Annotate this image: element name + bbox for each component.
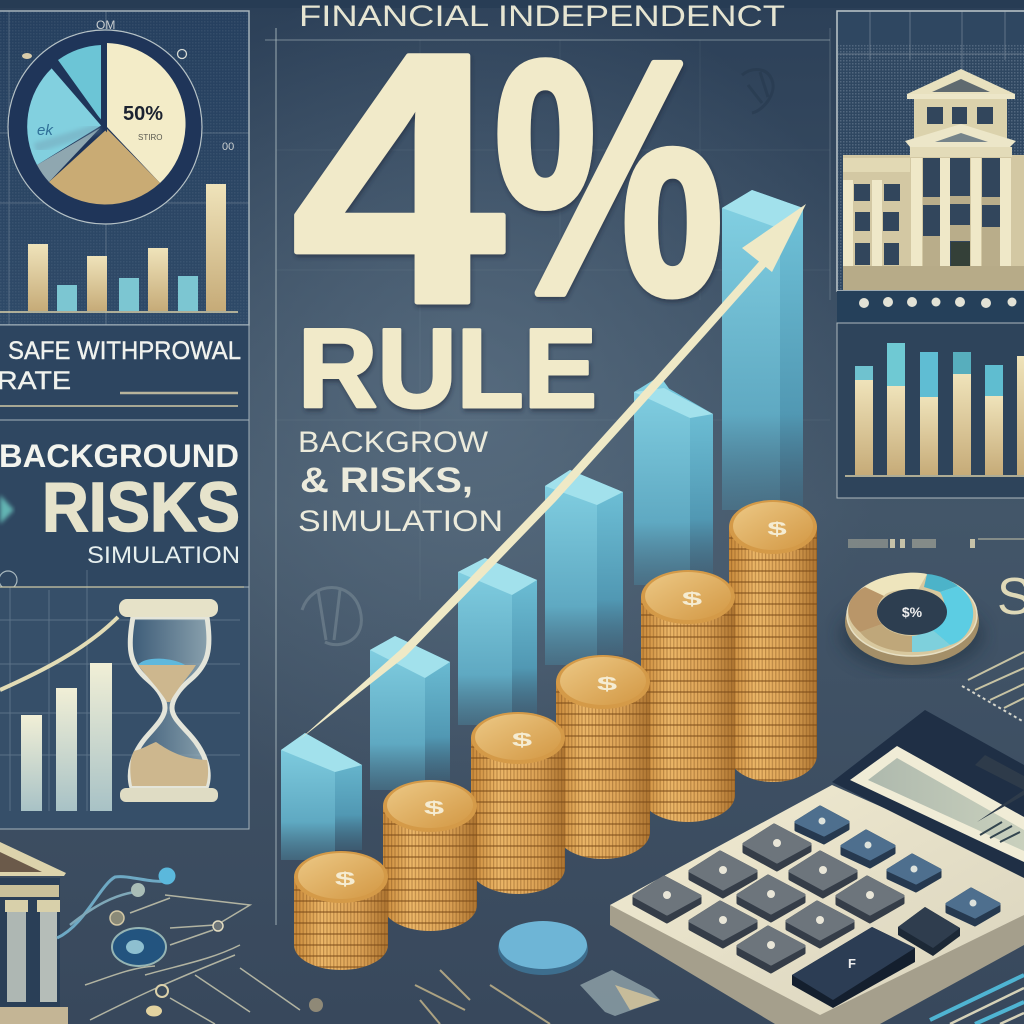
coin stack 3 xyxy=(471,712,565,894)
pie annotations: OM xyxy=(96,18,115,32)
heading: 4 percent: % xyxy=(494,0,724,365)
coin stack 4: $ xyxy=(597,674,617,694)
coin stack 1: $ xyxy=(335,869,355,889)
calculator head and display xyxy=(832,710,1024,878)
icon: bank bottom left xyxy=(0,842,68,1024)
heading: rule: RULE xyxy=(298,306,597,431)
bar 1 xyxy=(281,733,362,860)
central panel frame lines xyxy=(265,28,830,925)
coin stack 6 xyxy=(729,500,817,782)
coin stack 5 xyxy=(641,570,735,822)
rising bars xyxy=(21,663,112,811)
bar 6 xyxy=(722,190,803,510)
bar 5 xyxy=(634,376,713,585)
bar 2 xyxy=(370,636,450,790)
pill token xyxy=(498,921,588,975)
calculator keys: F xyxy=(848,956,856,971)
coin stack 2: $ xyxy=(424,798,444,818)
bar 3 xyxy=(458,558,537,725)
coin stack 5: $ xyxy=(682,589,702,609)
panel: risks text: BACKGROUND xyxy=(0,438,239,474)
desk details xyxy=(309,970,550,1024)
ticker strip xyxy=(848,539,1024,548)
coin stack 1 xyxy=(294,851,388,970)
bar chart xyxy=(0,184,238,312)
subheading: background, risks, simulation xyxy=(298,426,503,538)
panel: hourglass and growth chart xyxy=(0,570,249,829)
icon: donut dial: $% xyxy=(902,604,923,620)
coin stack 4 xyxy=(556,655,650,859)
panel: pie chart and bars xyxy=(0,11,249,325)
subheading: background, risks, simulation: SIMULATION xyxy=(298,505,503,538)
bar 4 xyxy=(545,470,623,665)
calculator xyxy=(610,710,1024,1024)
right edge data streaks xyxy=(962,652,1024,722)
panel: risks text: RISKS xyxy=(42,468,240,546)
panel: safe withdrawal rate xyxy=(0,325,249,420)
hourglass xyxy=(119,599,218,802)
pie annotations: 00 xyxy=(222,141,234,153)
network diagram xyxy=(57,868,300,1024)
panel: risks text: SIMULATION xyxy=(87,542,240,569)
pie chart: ek xyxy=(37,122,54,139)
panel: risks text xyxy=(0,420,249,589)
building xyxy=(843,69,1024,290)
pie chart: STIRO xyxy=(138,133,162,142)
growth arrow xyxy=(299,204,806,740)
coin stack 6: $ xyxy=(767,519,787,539)
subheading: background, risks, simulation: & RISKS, xyxy=(300,461,473,500)
heading: 4 percent xyxy=(291,0,724,378)
coin stacks xyxy=(294,500,817,970)
pie chart: 50% xyxy=(123,103,163,125)
pie annotations xyxy=(22,18,234,153)
coin stack 2 xyxy=(383,780,477,931)
panel: right bar chart xyxy=(837,323,1024,498)
icon: donut dial xyxy=(840,573,984,671)
strip of small icons xyxy=(837,291,1024,323)
panel: bank building xyxy=(837,11,1024,291)
title: financial independence: FINANCIAL INDEPENDENCT xyxy=(299,0,785,33)
pie chart xyxy=(8,30,202,224)
bar series xyxy=(281,190,803,860)
panel: safe withdrawal rate: SAFE WITHPROWAL xyxy=(8,337,241,365)
bottom-right data streaks xyxy=(930,975,1024,1024)
faint ornaments xyxy=(302,70,773,645)
subheading: background, risks, simulation: BACKGROW xyxy=(298,426,489,459)
trend line xyxy=(0,617,118,690)
calculator keys xyxy=(634,807,999,1008)
coin stack 3: $ xyxy=(512,730,532,750)
crystal paperweight xyxy=(580,970,660,1016)
